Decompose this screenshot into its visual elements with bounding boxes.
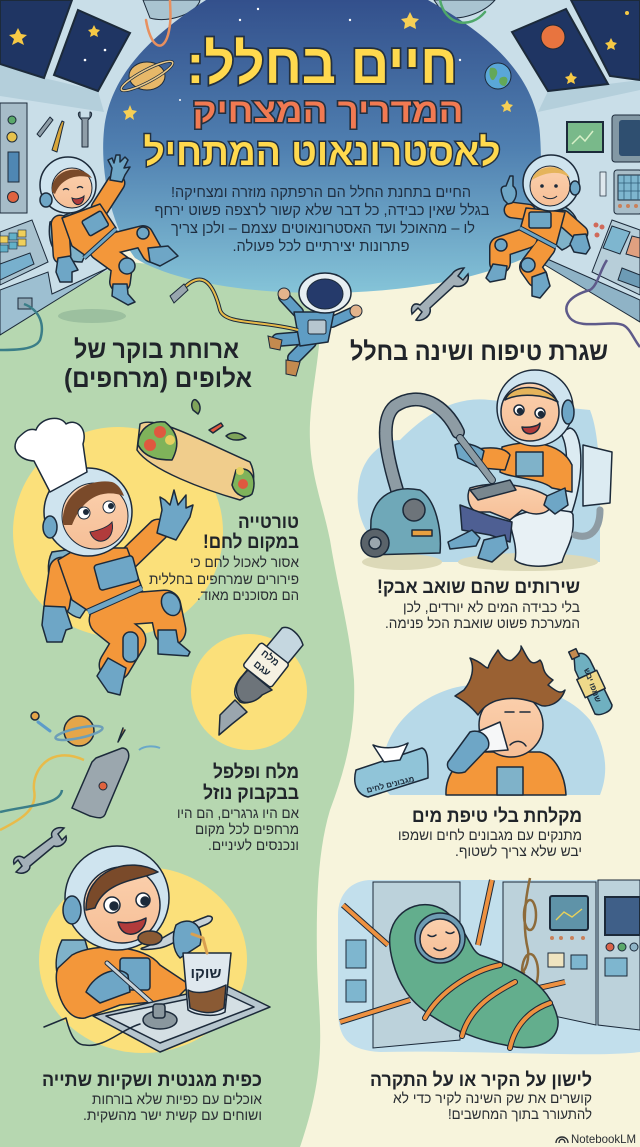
text: toilet vacuum: המערכת פשוט שואבת הכל פנימה. [385,615,580,632]
icon: wrench left [14,828,66,873]
limbs outline [60,183,152,282]
limbs fill right [500,210,580,277]
tissue box: מגבונים לחים [366,774,415,795]
text: sleeping: לישון על הקיר או על התקרה [370,1070,592,1091]
stars [123,8,513,120]
shadow [58,309,126,323]
vacuum cleaner [361,399,458,557]
heading: breakfast of champions: אלופים (מרחפים) [64,365,252,393]
text: tortilla: פירורים שמרחפים בחללית [149,571,299,588]
dome: blue space view [103,0,541,293]
chef limbs fill [57,530,170,665]
NotebookLM logo: NotebookLM [571,1132,636,1146]
text: tortilla: טורטייה [238,512,299,533]
chef limbs outline [57,530,170,665]
salt nozzle bottle: עגם [251,659,272,679]
yellow cable and connector [170,280,298,330]
astronaut wiping face [446,646,566,795]
salt nozzle bottle: מלח [259,647,282,669]
text: salt and pepper: מרחפים לכל מקום [195,821,299,838]
astronaut: waving left [40,155,178,305]
sleeping scene panel [338,880,640,1054]
intro paragraph: בגלל שאין כבידה, כל דבר שלא קשור לרצפה פשוט ירחף [154,202,490,219]
left second window [54,10,130,91]
astronaut: pointing right [486,155,590,298]
text: tortilla: אסור לאכול לחם כי [190,554,299,571]
text: salt and pepper: אם היו גרגרים, הם היו [177,806,299,822]
icon: saturn planet [119,57,175,95]
dry shampoo bottle: שמפו יבש [582,667,603,704]
yellow circle salt [191,634,307,750]
text: tortilla [149,512,299,604]
salt nozzle bottle [219,627,303,735]
cable right [566,260,640,347]
left wall controls [0,103,48,309]
text: magnetic spoon [42,1070,262,1124]
astronaut: small blue from behind [268,273,362,376]
left wall tools [37,112,92,152]
floating device with cables [0,746,160,830]
text: toilet vacuum [377,577,580,632]
right second window [512,9,608,91]
heading: breakfast of champions: ארוחת בוקר של [74,336,239,364]
text: tortilla: במקום לחם! [203,532,299,553]
text: shower [398,806,582,860]
text: salt and pepper [177,762,299,854]
astronaut on toilet [448,370,612,566]
astronaut chef [15,418,193,695]
burrito [137,400,254,500]
title: המדריך המצחיק [192,92,464,130]
intro paragraph: פתרונות יצירתיים לכל פעולה. [232,238,410,255]
text: magnetic spoon: אוכלים עם כפיות שלא בורחות [92,1091,262,1108]
planet small left [31,712,125,746]
tissue box [355,743,428,797]
blue limbs outline [278,297,352,358]
yellow circle bottom [39,867,247,1053]
icon: earth planet [485,63,511,89]
icon: wrench floating [411,268,468,320]
hanging cables [146,0,485,46]
intro paragraph: החיים בתחנת החלל הם הרפתקה מוזרה ומצחיקה! [171,184,471,201]
text: magnetic spoon: ושוחים עם קשית ישר מהשקית. [83,1108,262,1124]
tray with magnet and pouch [44,934,270,1052]
text: sleeping: להתעורר בתוך המחשבים! [448,1106,592,1123]
right ceiling window [571,0,640,80]
intro paragraph: לו – מהאוכל ועד האסטרונאוטים עצמם – ולכן צריך [171,220,475,237]
title [144,32,500,174]
blue blob toilet scene [358,399,600,562]
text: toilet vacuum: בלי כבידה המים לא יורדים, לכן [403,599,580,616]
title: לאסטרונאוט המתחיל [144,132,500,174]
text: sleeping [370,1070,592,1123]
yellow circle chef [13,427,223,637]
blue limbs fill [278,297,352,358]
text: tortilla: הם מסוכנים מאוד. [197,588,299,604]
text: sleeping: קושרים את שק השינה לקיר כדי לא [393,1090,592,1107]
astronaut eating [56,846,212,1018]
intro paragraph [154,184,490,255]
text: salt and pepper: ונכנסים לעיניים. [208,837,299,854]
heading: grooming and sleep routine: שגרת טיפוח ושינה בחלל [350,338,608,366]
shadows [362,553,598,571]
text: toilet vacuum: שירותים שהם שואב אבק! [377,577,580,598]
body [500,443,572,492]
cable bottom left [0,304,42,350]
toilet [583,445,612,506]
heading: breakfast of champions [64,336,252,393]
ceiling boxes [143,0,200,20]
dry shampoo bottle [569,649,612,715]
text: magnetic spoon: כפית מגנטית ושקיות שתייה [42,1070,262,1091]
limbs fill [60,183,152,282]
floor band right [545,258,640,322]
ceiling frame shading [0,64,104,112]
straps [340,880,565,1022]
background: green left side [0,250,354,1147]
text: salt and pepper: בבקבוק נוזל [203,783,299,804]
sleeping bag [390,905,558,1048]
text: shower: מקלחת בלי טיפת מים [412,806,582,827]
limbs outline right [500,210,580,277]
blue blob shower scene [383,684,605,795]
text: salt and pepper: מלח ופלפל [213,762,299,783]
left ceiling window [0,0,72,78]
tray with magnet and pouch: שוקו [191,965,221,982]
text: shower: מתנקים עם מגבונים לחים ושמפו [398,827,582,844]
right wall controls [567,115,640,295]
text: shower: יבש שלא צריך לשטוף. [455,843,582,860]
spaceship interior walls [0,0,640,335]
chef hat [15,418,87,492]
title: חיים בחלל: [186,32,458,95]
floor band left [0,268,108,335]
rope coil [522,878,538,990]
